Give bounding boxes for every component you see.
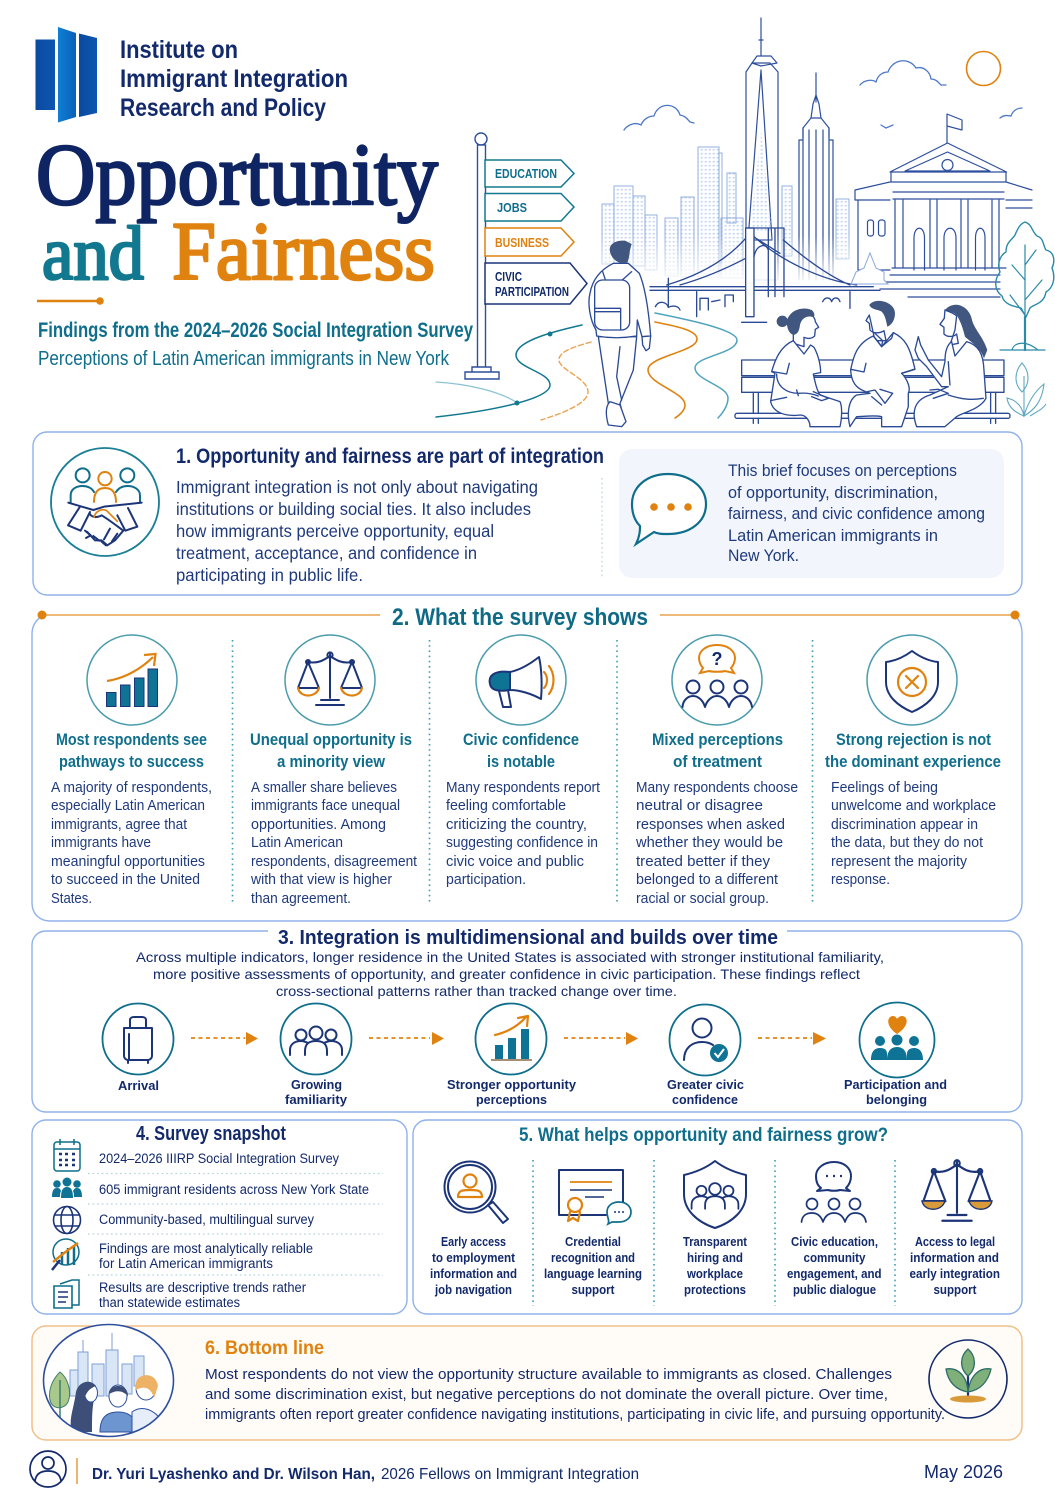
item: credential recognition [544,1170,642,1297]
logo: Immigrant Integration [120,65,348,93]
column 1: Most respondents see [56,730,207,749]
column 4: responses when asked [636,817,785,833]
item: civic education [787,1162,882,1297]
winding paths [436,313,737,420]
icon: rising bar chart [87,635,177,725]
authors: Dr. Yuri Lyashenko and Dr. Wilson Han, [92,1466,375,1483]
subtitle [38,319,473,370]
column 3: civic voice and public [446,854,584,870]
illustration: walking person with backpack [589,241,651,427]
sign: civic participation: CIVIC [495,269,522,284]
callout: Latin American immigrants in [728,526,938,545]
bush by capitol [851,253,888,284]
row: sample [52,1178,369,1198]
brooklyn bridge [650,228,880,322]
text block: Immigrant integration is not only about navigating [176,477,538,497]
item: credential recognition: Credential [565,1235,621,1249]
sign: civic participation: PARTICIPATION [495,284,569,299]
panel: section 6 bottom line [32,1324,1022,1440]
subtitle: Findings from the 2024–2026 Social Integration Survey [38,319,473,342]
authors: 2026 Fellows on Immigrant Integration [381,1466,639,1483]
text block: more positive assessments of opportunity, and greater confidence in civic participation. These findings reflect [153,966,860,982]
text block [176,477,538,585]
text block: Across multiple indicators, longer residence in the United States is associated with stronger institutional familiarity, [136,949,884,965]
icon: scales [285,635,375,725]
sun [966,52,1000,86]
logo: Institute on [120,36,238,64]
arrow [191,1032,258,1045]
person center [848,301,915,427]
column 5: response. [831,872,890,888]
illustration: community in city [44,1324,174,1438]
item: legal information: information and [910,1251,999,1265]
column 2: respondents, disagreement [251,854,417,870]
text block: participating in public life. [176,565,363,585]
row: descriptive: Results are descriptive trends rather [99,1280,306,1295]
text block: institutions or building social ties. It also includes [176,499,531,519]
title: Opportunity [36,127,438,224]
sign: business: BUSINESS [495,235,549,250]
row: method [54,1206,314,1234]
item: credential recognition: language learning [544,1267,642,1281]
column 3: Civic confidence [463,730,579,749]
row: survey name [54,1139,339,1171]
callout: fairness, and civic confidence among [728,504,985,523]
icon: author [30,1451,66,1487]
clouds [624,61,1022,130]
column 4: Mixed perceptions [652,730,783,749]
illustration: city skyline [595,18,1054,416]
item: transparent hiring: Transparent [683,1235,748,1249]
column 2: than agreement. [251,891,351,907]
column 1: to succeed in the United [51,872,200,888]
item: transparent hiring: hiring and [687,1251,743,1265]
step: growing familiarity: Growing [291,1077,342,1092]
column 1: immigrants have [51,835,151,851]
title: and [42,212,144,296]
step: growing familiarity: familiarity [285,1092,348,1107]
item: employment information: to employment [432,1251,516,1265]
item: employment information: job navigation [434,1283,512,1297]
panel: section 2 what the survey shows [32,604,1022,921]
sign: business [485,228,574,256]
item: civic education: engagement, and [787,1267,882,1281]
row: reliability: Findings are most analytically reliable [99,1241,313,1256]
logo [36,27,348,122]
arrow [369,1032,444,1045]
panel: section 3 integration over time [32,926,1022,1112]
item: transparent hiring [683,1161,748,1297]
row: method: Community-based, multilingual survey [99,1212,314,1227]
column 5: the dominant experience [825,752,1001,771]
callout: This brief focuses on perceptions [728,461,957,480]
capitol building [855,114,1032,297]
authors [92,1466,639,1483]
row: descriptive: than statewide estimates [99,1295,240,1310]
icon: megaphone [476,635,566,725]
item: employment information [430,1162,517,1297]
text block [205,1366,945,1423]
footer [30,1451,1003,1487]
sign: jobs: JOBS [497,200,527,215]
column 3: suggesting confidence in [446,835,598,851]
column 5 [825,635,1001,888]
column 2: A smaller share believes [251,780,397,796]
step: stronger opportunity perceptions: perceptions [476,1092,547,1107]
column 2: with that view is higher [250,872,392,888]
column 2 [250,635,417,907]
title: Fairness [172,205,435,297]
item: employment information: Early access [441,1235,506,1249]
step: arrival: Arrival [118,1078,159,1093]
column 4: of treatment [673,752,762,771]
callout: New York. [728,546,799,565]
step: participation and belonging: Participation and [844,1077,947,1092]
heading: 4. Survey snapshot [136,1123,286,1145]
column 2: a minority view [277,752,386,771]
title accent rule [37,297,104,305]
column 4: belonged to a different [636,872,778,888]
item: legal information: Access to legal [915,1235,995,1249]
row: survey name: 2024–2026 IIIRP Social Integration Survey [99,1151,339,1166]
person right [914,305,987,427]
heading: 3. Integration is multidimensional and builds over time [278,926,778,949]
column 2: opportunities. Among [251,817,386,833]
callout [619,449,1004,578]
step: participation and belonging [844,1002,947,1107]
person left [771,309,842,427]
heading with rules: 2. What the survey shows [392,604,648,631]
item: employment information: information and [430,1267,517,1281]
heading: 5. What helps opportunity and fairness grow? [519,1125,888,1146]
step: greater civic confidence [667,1004,744,1107]
item: legal information [910,1160,1000,1297]
illustration: bench [735,360,1010,423]
column 3 [446,635,600,888]
column 2: immigrants face unequal [251,798,400,814]
arrow [564,1032,638,1045]
item: credential recognition: recognition and [551,1251,635,1265]
text block: how immigrants perceive opportunity, equal [176,521,494,541]
heading with rules [38,604,1020,631]
column 4: whether they would be [635,835,783,851]
icon: handshake with people [51,448,159,556]
one world trade center tower [746,18,778,280]
column 1: pathways to success [59,752,204,771]
column 1: A majority of respondents, [51,780,212,796]
column 5: represent the majority [831,854,968,870]
item: civic education: Civic education, [791,1235,878,1249]
text block [136,949,884,999]
step: stronger opportunity perceptions: Stronger opportunity [447,1077,577,1092]
item: transparent hiring: workplace [686,1267,743,1281]
sign: education [485,160,574,187]
item: credential recognition: support [572,1283,615,1297]
logo: Research and Policy [120,94,326,122]
step: greater civic confidence: confidence [672,1092,738,1107]
tree [996,222,1054,350]
column 5: discrimination appear in [831,817,978,833]
column 5: Strong rejection is not [836,730,991,749]
panel: section 4 survey snapshot [32,1120,407,1314]
item: transparent hiring: protections [684,1283,746,1297]
step: arrival [102,1004,174,1093]
step: participation and belonging: belonging [866,1092,927,1107]
column 4: neutral or disagree [636,798,763,814]
sign: education: EDUCATION [495,166,557,181]
text block: treatment, acceptance, and confidence in [176,543,477,563]
step: greater civic confidence: Greater civic [667,1077,744,1092]
icon: speech bubble [632,474,706,544]
column 2: Unequal opportunity is [250,730,412,749]
illustration: three people on bench [771,301,987,427]
column 3: participation. [446,872,526,888]
sign: civic participation [485,263,587,304]
shrub [1007,363,1046,416]
arrow [758,1032,826,1045]
date: May 2026 [924,1461,1003,1482]
column 3: criticizing the country, [446,817,587,833]
fade at skyline base [595,235,865,285]
column 1: States. [51,891,92,907]
signpost [465,133,587,379]
text block: Most respondents do not view the opportunity structure available to immigrants as closed. Challenges [205,1366,892,1383]
heading: 6. Bottom line [205,1337,324,1359]
column 1: especially Latin American [51,798,205,814]
row: descriptive [54,1280,306,1310]
column 4: treated better if they [636,854,771,870]
icon: question bubble and people [672,635,762,725]
heading: 1. Opportunity and fairness are part of integration [176,445,604,468]
column 4 [635,635,798,907]
step: stronger opportunity perceptions [447,1004,577,1107]
column 5: the data, but they do not [831,835,983,851]
column 2: Latin American [251,835,343,851]
icon: shield with x [867,635,957,725]
text block: immigrants often report greater confidence navigating institutions, participating in civic life, and pursuing opportunity. [205,1406,945,1423]
item: legal information: support [934,1283,977,1297]
row: sample: 605 immigrant residents across New York State [99,1182,369,1197]
step: growing familiarity [280,1004,352,1107]
icon: question bubble and people: ? [712,649,722,669]
column 1 [51,635,212,907]
panel: section 5 what helps [413,1120,1022,1314]
sign: jobs [485,194,574,221]
column 3: feeling comfortable [446,798,566,814]
empire state building [799,73,833,280]
column 3: Many respondents report [446,780,600,796]
subtitle: Perceptions of Latin American immigrants in New York [38,347,450,370]
row: reliability: for Latin American immigrants [99,1256,273,1271]
text block: cross-sectional patterns rather than tracked change over time. [276,983,677,999]
item: civic education: public dialogue [793,1283,876,1297]
column 4: Many respondents choose [636,780,798,796]
text block: and some discrimination exist, but negative perceptions do not dominate the overall picture. Over time, [205,1386,888,1403]
panel: section 1 opportunity and fairness [33,432,1022,595]
column 5: unwelcome and workplace [831,798,996,814]
item: civic education: community [804,1251,866,1265]
callout: of opportunity, discrimination, [728,483,938,502]
column 3: is notable [487,752,555,771]
column 1: meaningful opportunities [51,854,205,870]
icon: sprouting plant [929,1340,1007,1418]
row: reliability [52,1239,313,1271]
title [36,127,438,297]
column 5: Feelings of being [831,780,938,796]
column 4: racial or social group. [636,891,769,907]
column 1: immigrants, agree that [51,817,187,833]
item: legal information: early integration [910,1267,1000,1281]
